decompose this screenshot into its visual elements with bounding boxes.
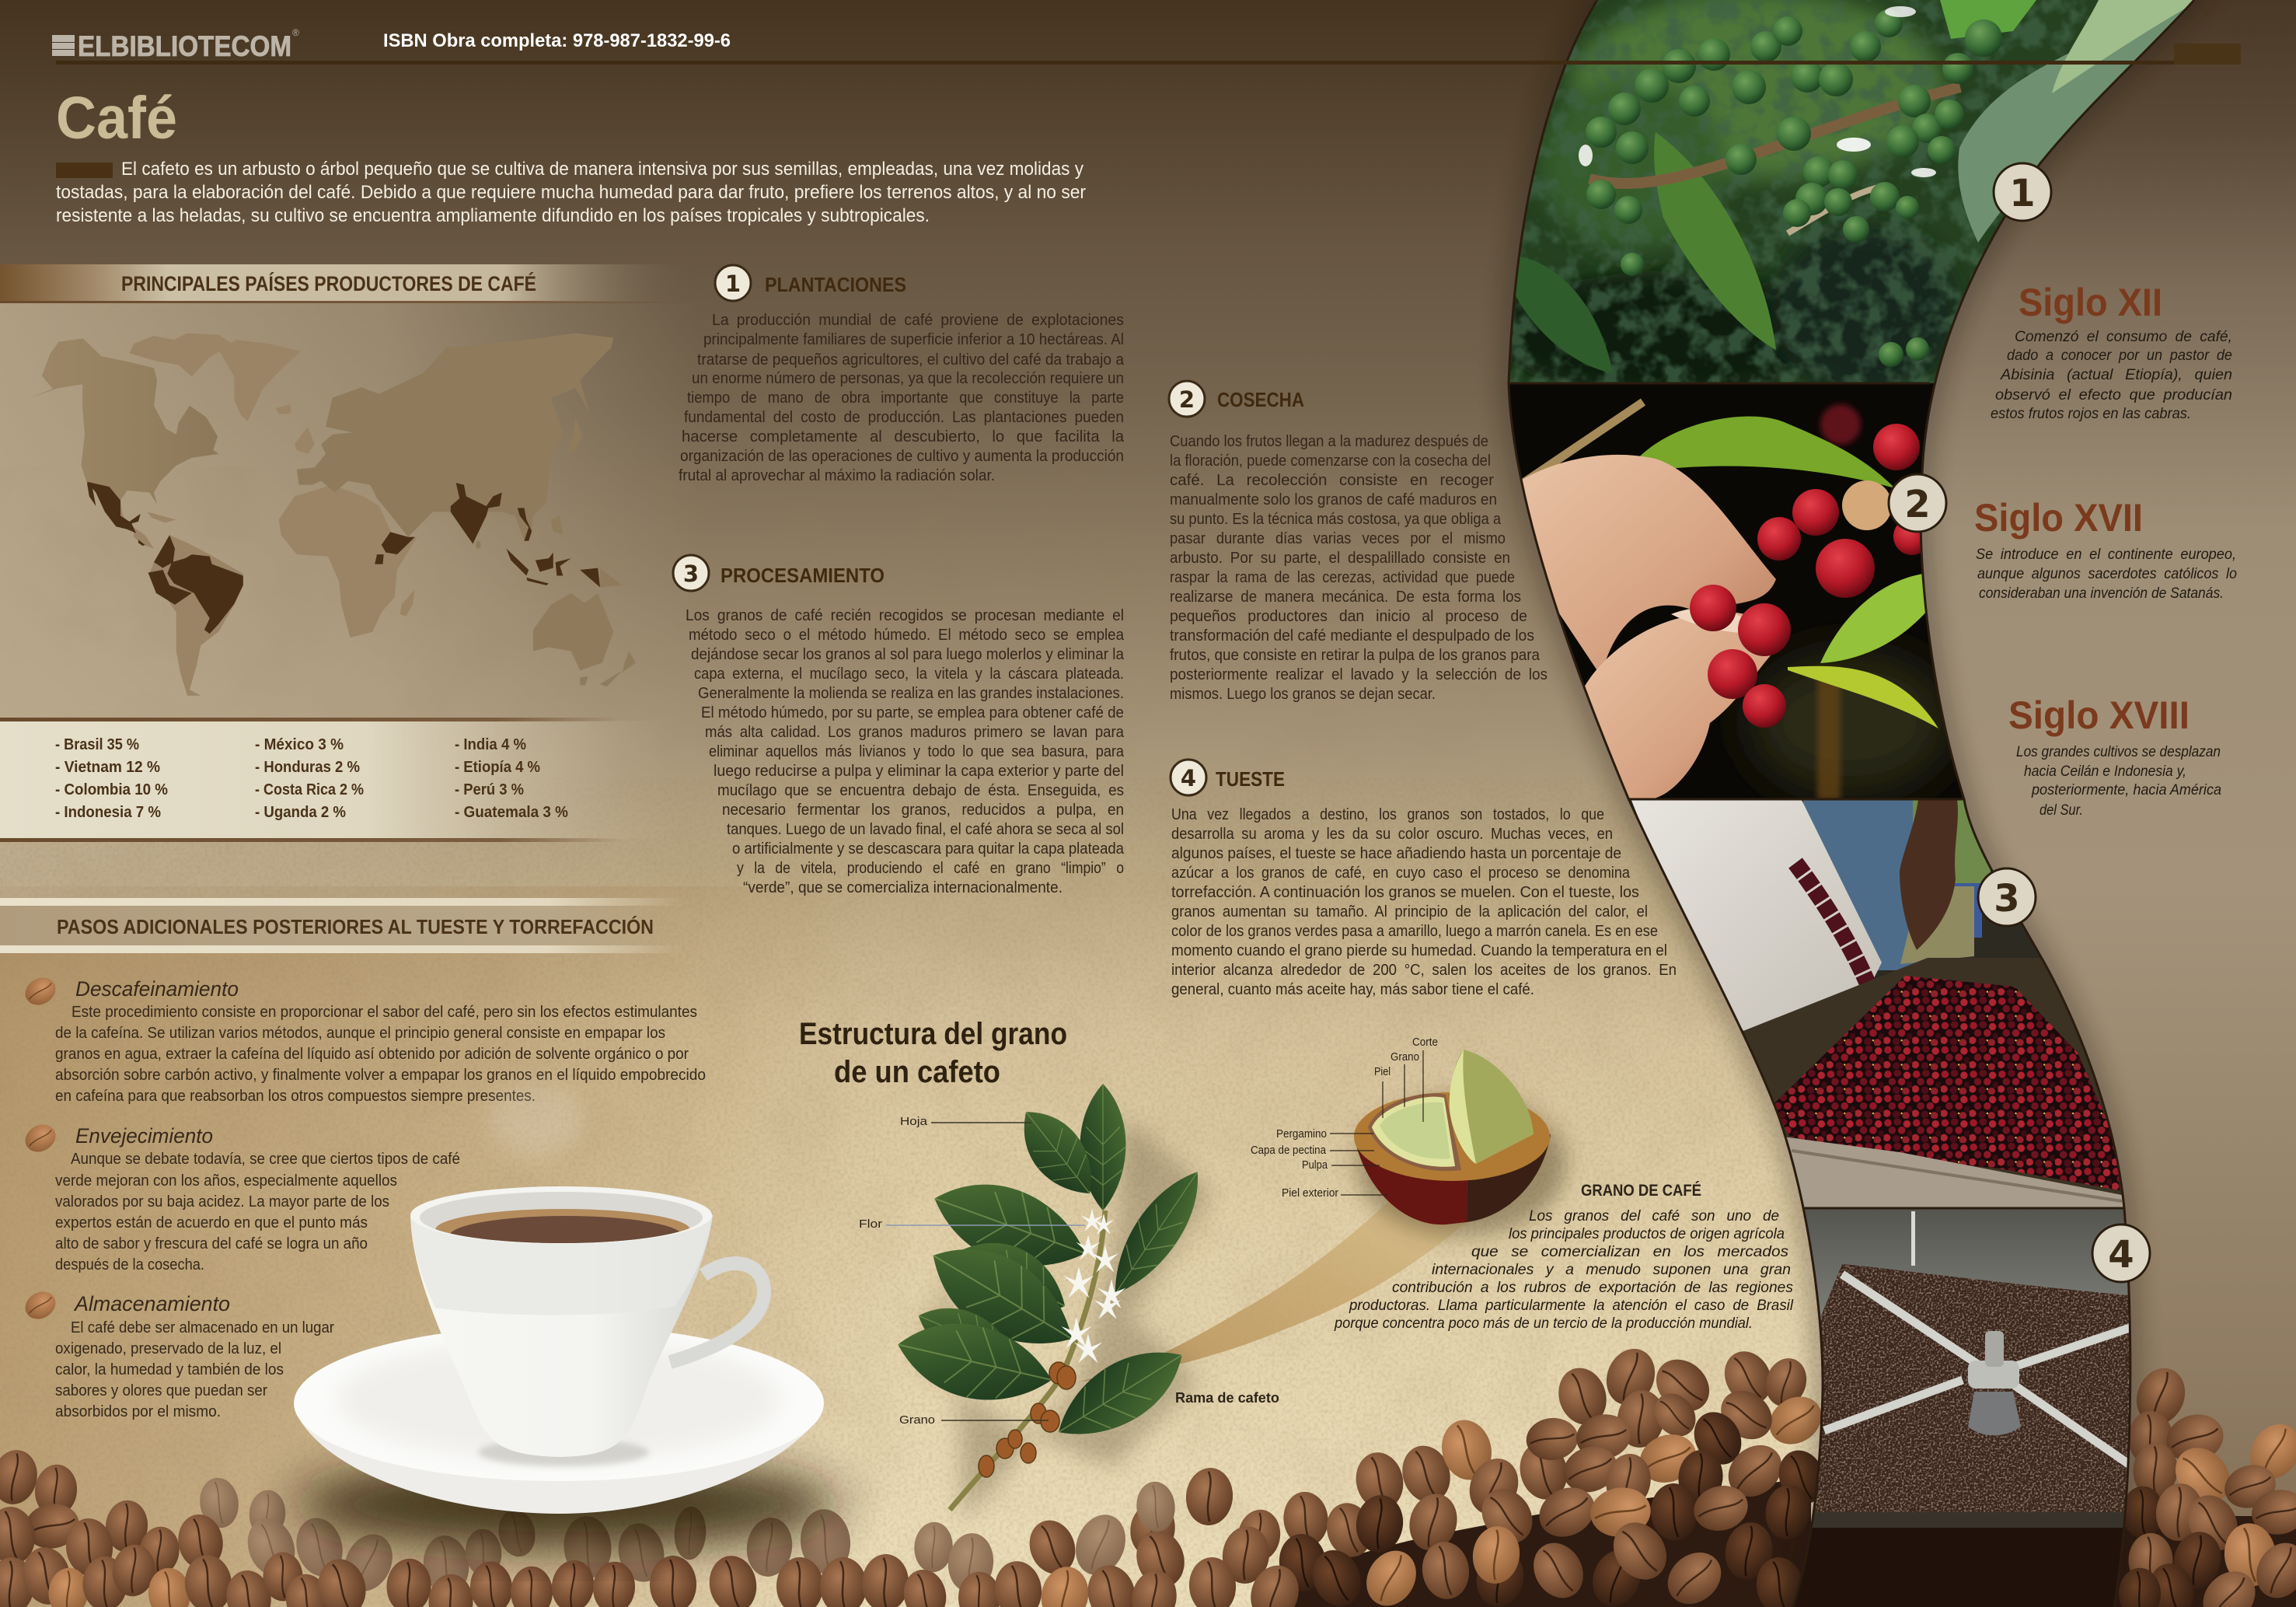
coffee bean cross-section diagram: Grano <box>1391 1050 1419 1064</box>
pulp <box>1354 1092 1550 1181</box>
handle <box>670 1263 764 1362</box>
step: almacenamiento: sabores y olores que puedan ser <box>55 1382 267 1399</box>
number badge: 2 <box>1179 386 1195 413</box>
intro paragraph: El cafeto es un arbusto o árbol pequeño que se cultiva de manera intensiva por sus semillas, empleadas, una vez molidas y <box>121 159 1083 180</box>
step: almacenamiento: El café debe ser almacenado en un lugar <box>71 1319 334 1336</box>
section 1: plantaciones: La producción mundial de café proviene de explotaciones <box>712 311 1124 329</box>
history: siglo XII: observó el efecto que producían <box>1995 386 2232 403</box>
panel: producer percentages list: - Etiopía 4 % <box>455 759 540 776</box>
inner seed layers <box>1368 1093 1461 1171</box>
step: envejecimiento: expertos están de acuerdo en que el punto más <box>55 1214 368 1231</box>
section 1: plantaciones: tratarse de pequeños agricultores, el cultivo del café da trabajo a <box>697 351 1125 369</box>
text block: grano de cafe: porque concentra poco más de un tercio de la producción mundial. <box>1334 1315 1753 1332</box>
continents <box>28 339 218 527</box>
coffee bean cross-section diagram: Corte <box>1412 1036 1438 1049</box>
section 2: cosecha <box>1169 381 1548 703</box>
photo 3: sack and harvested cherries <box>1617 798 2145 1210</box>
branch labels: Hoja <box>900 1115 928 1128</box>
text block: grano de cafe: internacionales y a menudo suponen una gran <box>1432 1261 1791 1278</box>
step: envejecimiento <box>20 1120 460 1273</box>
callout cone from berry to bean <box>1079 1197 1477 1382</box>
branch labels: Flor <box>859 1217 882 1231</box>
section 2: cosecha: su punto. Es la técnica más costosa, ya que obliga a <box>1170 510 1502 528</box>
section 1: plantaciones: organización de las operaciones de cultivo y aumenta la producción <box>680 447 1124 465</box>
panel: producer percentages list: - Guatemala 3 % <box>455 804 568 821</box>
section 3: procesamiento: capa externa, el mucílago seco, la vitela y la cáscara plateada. <box>694 665 1124 683</box>
photo number badge 3: 3 <box>1994 877 2020 921</box>
leaves <box>1080 1084 1125 1210</box>
section 4: tueste: interior alcanza alrededor de 200 °C, salen los aceites de los granos. En <box>1171 961 1677 979</box>
photo number badge 3 <box>1978 868 2036 926</box>
section 4: tueste: desarrolla su aroma y les da su color oscuro. Muchas veces, en <box>1171 825 1613 843</box>
coffee beans pile centre right <box>1135 1341 1832 1607</box>
step: envejecimiento: valorados por su baja acidez. La mayor parte de los <box>55 1193 389 1210</box>
section 2: cosecha: Cuando los frutos llegan a la madurez después de <box>1170 432 1488 450</box>
dark outline of band <box>1509 0 2194 1607</box>
section 4: tueste: granos aumentan su tamaño. Al principio de la aplicación del calor, el <box>1171 903 1648 921</box>
section 3: procesamiento: necesario fermentar los granos, reducidos a pulpa, en <box>722 801 1124 819</box>
panel: producer percentages list: - India 4 % <box>455 736 526 753</box>
number badge: 1 <box>725 271 741 297</box>
section 2: cosecha: la floración, puede comenzarse con la cosecha del <box>1170 452 1491 470</box>
section 2: cosecha: realizarse de manera mecánica. De esta forma los <box>1170 588 1521 606</box>
history: siglo XII: Abisinia (actual Etiopía), quien <box>2000 366 2232 383</box>
section 2: cosecha: mismos. Luego los granos se dejan secar. <box>1170 685 1436 703</box>
section 4: tueste: Una vez llegados a destino, los granos son tostados, lo que <box>1171 805 1604 823</box>
step: envejecimiento: Envejecimiento <box>75 1124 213 1148</box>
photo number badge 1 <box>1994 163 2051 221</box>
cup rim <box>410 1186 712 1244</box>
panel: producer percentages list: - Perú 3 % <box>455 781 524 798</box>
section 2: cosecha: pasar durante días varias veces por el mismo <box>1170 529 1506 547</box>
step: envejecimiento: verde mejoran con los años, especialmente aquellos <box>55 1172 397 1190</box>
text block: grano de cafe: los principales productos de origen agrícola <box>1509 1225 1785 1242</box>
section 3: procesamiento: mucílago que se encuentra debajo de ésta. Enseguida, es <box>717 781 1124 799</box>
text block: grano de cafe: que se comercializan en los mercados <box>1471 1243 1788 1260</box>
number badge: 3 <box>683 561 699 587</box>
coffee beans pile left and centre <box>0 1446 1192 1607</box>
section 1: plantaciones: fundamental del costo de producción. Las plantaciones pueden <box>684 408 1124 426</box>
panel: producer percentages list: - Brasil 35 % <box>55 736 139 753</box>
panel: producing countries banner: PRINCIPALES PAÍSES PRODUCTORES DE CAFÉ <box>121 271 536 295</box>
section 2: cosecha: posteriormente realizar el lavado y la selección de los <box>1170 666 1548 683</box>
text block: grano de cafe: productoras. Llama particularmente la atención el caso de Brasil <box>1349 1297 1794 1314</box>
photo number badge 4: 4 <box>2108 1233 2134 1277</box>
photo 4: roaster with arms <box>1788 1209 2145 1607</box>
history: siglo XVIII: Los grandes cultivos se desplazan <box>2016 743 2221 760</box>
photo number badge 4 <box>2092 1224 2150 1282</box>
coffee beans pile right edge <box>2114 1361 2296 1607</box>
coffee surface <box>435 1209 690 1256</box>
intro paragraph: resistente a las heladas, su cultivo se encuentra ampliamente difundido en los países tropicales y subtropicales. <box>56 205 930 226</box>
structure heading: de un cafeto <box>834 1055 1000 1089</box>
section 3: procesamiento: y la de vitela, produciendo el café en grano “limpio” o <box>737 859 1124 877</box>
diagram shadow <box>1356 1096 1566 1236</box>
panel: producer percentages list: - Honduras 2 % <box>255 759 360 776</box>
history: siglo XII: Comenzó el consumo de café, <box>2015 328 2232 345</box>
section 4: tueste: momento cuando el grano pierde su humedad. Cuando la temperatura en el <box>1171 941 1667 959</box>
panel: producer percentages list: - Colombia 10 % <box>55 781 168 798</box>
step: descafeinamiento: Descafeinamiento <box>75 977 239 1001</box>
section 3: procesamiento: tanques. Luego de un lavado final, el café ahora se seca al sol <box>727 820 1124 838</box>
number badge: 4 <box>1181 765 1196 791</box>
section 4: tueste: general, cuanto más aceite hay, más sabor tiene el café. <box>1171 980 1534 998</box>
step: descafeinamiento <box>20 973 706 1105</box>
section 4: tueste: torrefacción. A continuación los granos se muelen. Con el tueste, los <box>1171 883 1639 901</box>
coffee bean cross-section diagram: Pergamino <box>1276 1127 1327 1141</box>
panel: additional steps banner: PASOS ADICIONALES POSTERIORES AL TUESTE Y TORREFACCIÓN <box>57 915 654 938</box>
section 3: procesamiento: PROCESAMIENTO <box>721 564 885 587</box>
coffee cup and saucer <box>294 1081 839 1547</box>
icon: coffee bean <box>20 973 61 1010</box>
number badge <box>673 555 709 591</box>
history: siglo XVII: Se introduce en el continente europeo, <box>1976 546 2236 563</box>
photo band with four process photographs <box>1492 0 2215 1607</box>
history: siglo XVII: aunque algunos sacerdotes católicos lo <box>1977 565 2237 582</box>
world map <box>28 334 636 696</box>
section 2: cosecha: manualmente solo los granos de café maduros en <box>1170 491 1497 508</box>
diagram labels <box>1330 1050 1423 1195</box>
ISBN line: ISBN Obra completa: 978-987-1832-99-6 <box>383 30 731 51</box>
step: descafeinamiento: en cafeína para que reabsorban los otros compuestos siempre presentes. <box>55 1087 536 1105</box>
section 3: procesamiento: luego reducirse a pulpa y eliminar la capa exterior y parte del <box>714 762 1124 780</box>
panel: producer percentages list: - México 3 % <box>255 736 344 753</box>
section 2: cosecha: raspar la rama de las cerezas, actividad que puede <box>1170 568 1515 586</box>
step: envejecimiento: después de la cosecha. <box>55 1256 204 1273</box>
cup body <box>410 1215 713 1457</box>
history: siglo XVII: consideraban una invención de Satanás. <box>1979 585 2224 602</box>
step: descafeinamiento: granos en agua, extraer la cafeína del líquido así obtenido por adición de solvente orgánico o por <box>55 1045 689 1063</box>
section 3: procesamiento: dejándose secar los granos al sol para luego molerlos y eliminar la <box>691 645 1125 663</box>
number badge <box>1169 381 1205 417</box>
section 1: plantaciones: principalmente familiares de superficie inferior a 10 hectáreas. Al <box>703 330 1124 348</box>
coffee bean cross-section diagram <box>1251 1036 1566 1236</box>
icon: coffee bean <box>20 1287 61 1324</box>
step: almacenamiento <box>20 1287 334 1420</box>
section 3: procesamiento: Los granos de café recién recogidos se procesan mediante el <box>686 606 1124 624</box>
intro paragraph <box>56 159 1086 226</box>
structure heading: Estructura del grano <box>799 1017 1067 1051</box>
steam <box>490 1081 583 1158</box>
panel: producer percentages list: - Indonesia 7 % <box>55 804 161 821</box>
intro paragraph: tostadas, para la elaboración del café. Debido a que requiere mucha humedad para dar fruto, prefiere los terrenos altos, y al no ser <box>56 182 1086 203</box>
photo 2: hand picking red cherries <box>1509 383 1963 798</box>
panel: producer percentages list <box>0 718 668 842</box>
section 2: cosecha: COSECHA <box>1217 388 1304 411</box>
history: siglo XII: Siglo XII <box>2019 281 2162 324</box>
history: siglo XVII: Siglo XVII <box>1974 496 2143 540</box>
panel: additional steps banner <box>0 898 684 953</box>
text block: grano de cafe: Los granos del café son uno de <box>1529 1207 1779 1224</box>
number badge <box>1171 760 1206 795</box>
history: siglo XVIII <box>2008 693 2221 819</box>
step: almacenamiento: absorbidos por el mismo. <box>55 1403 221 1420</box>
logo: ® <box>292 27 299 38</box>
history: siglo XVIII: hacia Ceilán e Indonesia y, <box>2024 763 2186 780</box>
section 3: procesamiento <box>673 555 1125 896</box>
panel: producer percentages list: - Vietnam 12 % <box>55 759 160 776</box>
photo number badge 2: 2 <box>1904 483 1931 526</box>
number badge <box>715 265 751 301</box>
history: siglo XVII <box>1974 496 2237 602</box>
branch shadow <box>920 1115 1212 1523</box>
flowers <box>1081 1209 1103 1231</box>
section 2: cosecha: frutos, que consiste en retirar la pulpa de los granos para <box>1170 646 1541 664</box>
text block: grano de cafe: contribución a los rubros de exportación de las regiones <box>1392 1279 1793 1296</box>
icon: coffee bean <box>20 1120 61 1157</box>
section 1: plantaciones: PLANTACIONES <box>765 273 906 296</box>
stem <box>950 1210 1105 1510</box>
section 4: tueste: TUESTE <box>1216 767 1285 791</box>
section 3: procesamiento: o artificialmente y se descascara para quitar la capa plateada <box>732 840 1125 858</box>
step: almacenamiento: Almacenamiento <box>73 1292 230 1315</box>
text block: grano de cafe: GRANO DE CAFÉ <box>1581 1182 1701 1200</box>
section 3: procesamiento: El método húmedo, por su parte, se emplea para obtener café de <box>701 704 1124 721</box>
branch labels <box>859 1115 1279 1427</box>
outer skin <box>1354 1134 1467 1224</box>
section 1: plantaciones: tiempo de mano de obra importante que constituye la parte <box>687 389 1124 407</box>
section 3: procesamiento: Generalmente la molienda se realiza en las grandes instalaciones. <box>698 684 1124 702</box>
section 3: procesamiento: método seco o el método húmedo. El método seco se emplea <box>689 626 1125 644</box>
coffee bean cross-section diagram: Piel exterior <box>1282 1186 1338 1200</box>
history: siglo XVIII: posteriormente, hacia América <box>2031 781 2221 798</box>
history: siglo XVIII: del Sur. <box>2040 802 2083 819</box>
history: siglo XII: dado a conocer por un pastor de <box>2007 347 2232 364</box>
history: siglo XVIII: Siglo XVIII <box>2008 693 2190 737</box>
coffee branch illustration <box>890 1084 1216 1523</box>
section 1: plantaciones: un enorme número de personas, ya que la recolección requiere un <box>692 369 1124 387</box>
section 2: cosecha: arbusto. Por su parte, el despalillado consiste en <box>1170 549 1510 567</box>
saucer shadow <box>295 1462 839 1547</box>
section 1: plantaciones <box>679 265 1125 484</box>
section 2: cosecha: café. La recolección consiste en recoger <box>1170 471 1494 489</box>
photo number badge 1: 1 <box>2009 172 2036 215</box>
coffee bean cross-section diagram: Pulpa <box>1302 1158 1328 1172</box>
section 4: tueste: azúcar a los granos de café, en cuyo caso el proceso se denomina <box>1171 864 1631 882</box>
header rule <box>56 44 2241 65</box>
berries <box>979 1362 1076 1477</box>
history: siglo XII: estos frutos rojos en las cabras. <box>1991 405 2191 422</box>
right history panel background <box>1921 0 2296 1607</box>
section 3: procesamiento: eliminar aquellos más livianos y todo lo que sea basura, para <box>709 742 1125 760</box>
step: descafeinamiento: absorción sobre carbón activo, y finalmente volver a empapar los granos en el líquido empobrecido <box>55 1066 706 1084</box>
section 3: procesamiento: más alta calidad. Los granos maduros primero se lavan para <box>705 723 1125 741</box>
step: envejecimiento: alto de sabor y frescura del café se logra un año <box>55 1235 368 1252</box>
highlighted producer countries <box>87 482 600 634</box>
section 3: procesamiento: “verde”, que se comercializa internacionalmente. <box>743 879 1063 896</box>
seed wedge <box>1450 1050 1534 1164</box>
panel: producer percentages list: - Costa Rica 2 % <box>255 781 364 798</box>
branch labels: Rama de cafeto <box>1175 1390 1279 1406</box>
panel: producer percentages list: - Uganda 2 % <box>255 804 346 821</box>
structure heading <box>799 1017 1067 1089</box>
section 1: plantaciones: hacerse completamente al descubierto, lo que facilita la <box>682 428 1125 445</box>
section 2: cosecha: transformación del café mediante el despulpado de los <box>1170 627 1534 645</box>
photo 1: green coffee berries <box>1492 0 2215 397</box>
coffee bean cross-section diagram: Capa de pectina <box>1251 1144 1327 1157</box>
branch labels: Grano <box>899 1413 935 1427</box>
step: envejecimiento: Aunque se debate todavía, se cree que ciertos tipos de café <box>71 1150 460 1168</box>
photo number badge 2 <box>1889 474 1946 532</box>
step: almacenamiento: oxigenado, preservado de la luz, el <box>55 1340 281 1357</box>
section 4: tueste: algunos países, el tueste se hace añadiendo hasta un porcentaje de <box>1171 844 1621 862</box>
section 4: tueste: color de los granos verdes pasa a amarillo, luego a marrón canela. Es en ese <box>1171 922 1658 940</box>
text block: grano de cafe <box>1334 1182 1794 1332</box>
saucer <box>299 1415 820 1514</box>
section 4: tueste <box>1171 760 1677 998</box>
coffee bean cross-section diagram: Piel <box>1374 1065 1391 1078</box>
step: descafeinamiento: de la cafeína. Se utilizan varios métodos, aunque el principio general consiste en empapar los <box>55 1024 665 1042</box>
logo: ELBIBLIOTECOM <box>78 30 291 62</box>
history: siglo XII <box>1991 281 2232 422</box>
section 2: cosecha: pequeños productores dan inicio al proceso de <box>1170 607 1527 625</box>
band shadow <box>1509 0 2194 1607</box>
panel: producing countries banner <box>0 264 700 303</box>
step: descafeinamiento: Este procedimiento consiste en proporcionar el sabor del café, pero sin los efectos estimulantes <box>72 1003 697 1021</box>
section 1: plantaciones: frutal al aprovechar al máximo la radiación solar. <box>679 466 995 484</box>
main title: Café <box>56 85 177 152</box>
step: almacenamiento: calor, la humedad y también de los <box>55 1361 284 1378</box>
